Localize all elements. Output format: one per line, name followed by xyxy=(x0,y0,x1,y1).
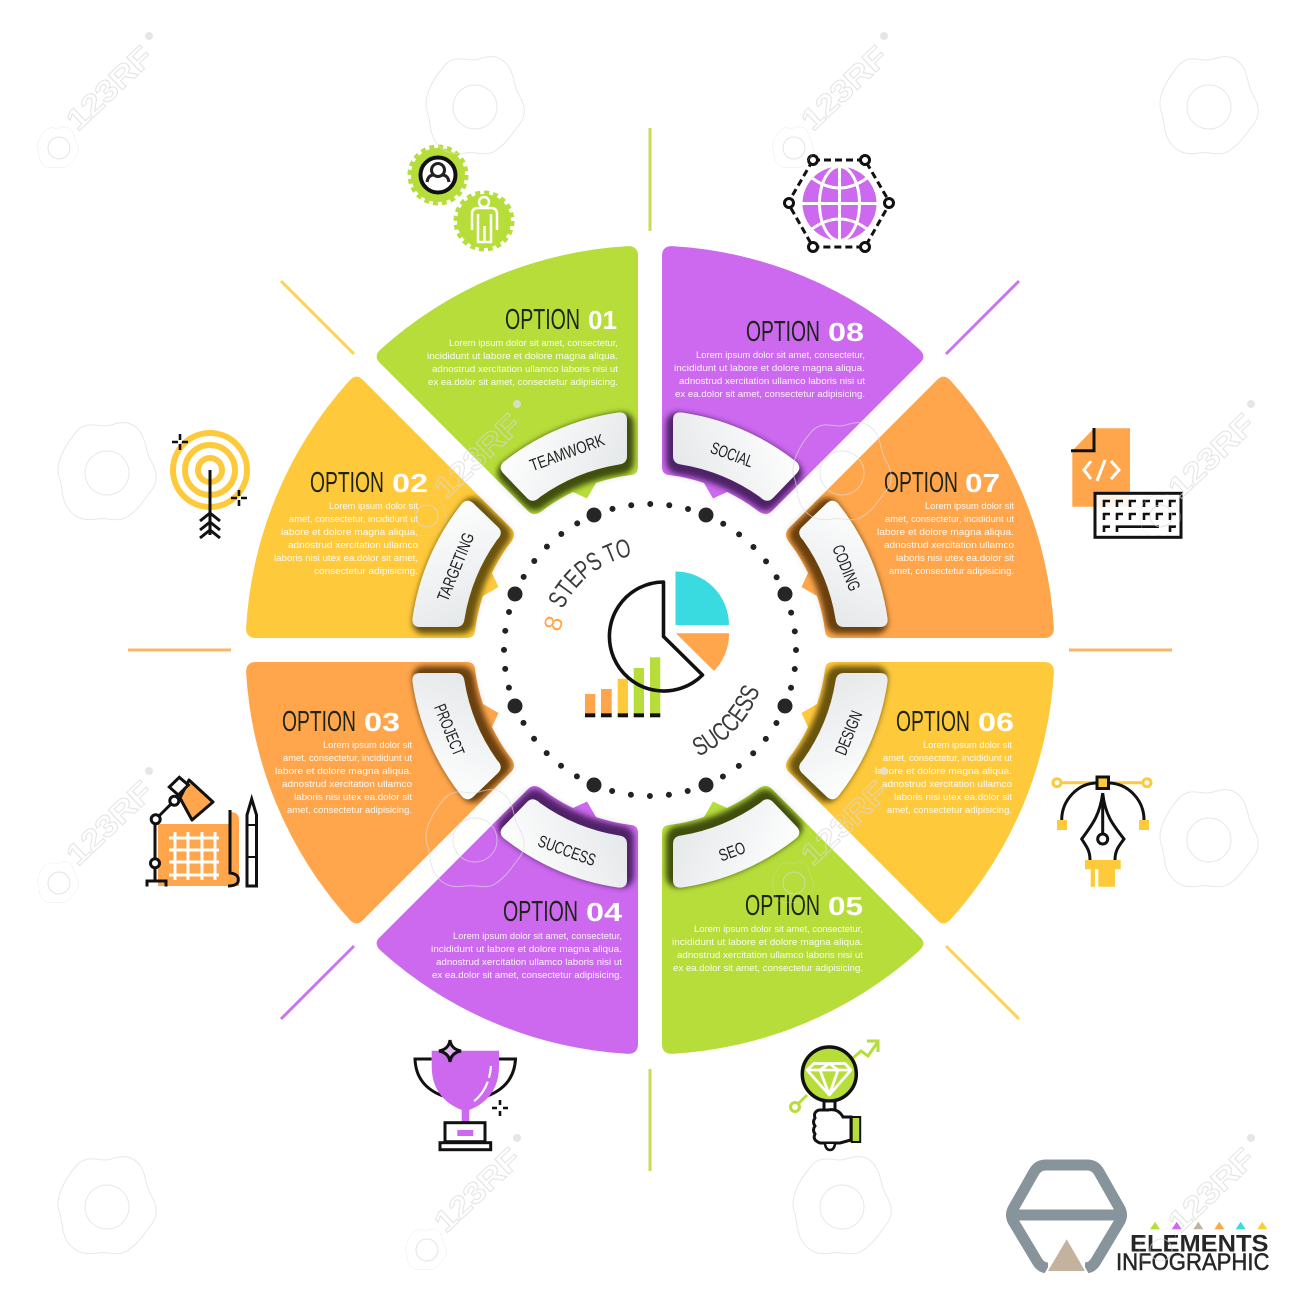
body text: amet, consectetur, incididunt ut xyxy=(885,514,1015,524)
chart: pie xyxy=(676,572,729,671)
body text: adnostrud xercitation ullamco laboris nisi ut xyxy=(677,950,864,960)
segment shape and tab xyxy=(662,246,923,514)
icon: network globe xyxy=(784,156,894,252)
watermarks: 123RF: 123RF xyxy=(428,1142,528,1239)
body text: incididunt ut labore et dolore magna aliqua. xyxy=(674,363,865,373)
body text: labore et dolore magna aliqua. xyxy=(877,527,1014,537)
body text: incididunt ut labore et dolore magna aliqua. xyxy=(431,944,622,954)
panel: option 06 xyxy=(786,662,1054,923)
watermarks: 123RF: 123RF xyxy=(60,775,160,872)
heading: 07 xyxy=(965,468,1000,498)
body text: labore et dolore magna aliqua. xyxy=(281,527,418,537)
heading: 05 xyxy=(828,891,863,921)
heading: 04 xyxy=(586,897,623,927)
body text xyxy=(275,740,413,815)
body text: incididunt ut labore et dolore magna aliqua. xyxy=(427,351,618,361)
heading: OPTION xyxy=(282,706,356,738)
body text: amet, consectetur, incididunt ut xyxy=(883,753,1013,763)
center title: success: SUCCESS xyxy=(692,686,758,755)
icon: target and arrow xyxy=(172,433,247,538)
line: bottom ray xyxy=(648,1069,652,1171)
chart: bars xyxy=(585,657,660,717)
tab label: SOCIAL xyxy=(708,438,756,471)
logo: wordmark xyxy=(1116,1231,1270,1276)
body text: laboris nisi utex ea.dolor sit xyxy=(894,792,1013,802)
body text: adnostrud xercitation ullamco xyxy=(884,540,1014,550)
icon: code file and keyboard xyxy=(1071,428,1181,537)
heading: 08 xyxy=(828,317,864,347)
body text: incididunt ut labore et dolore magna aliqua. xyxy=(672,937,863,947)
body text: ex ea.dolor sit amet, consectetur adipisicing. xyxy=(675,389,865,399)
body text xyxy=(427,338,619,387)
segment shape and tab xyxy=(377,786,638,1054)
tab label: SUCCESS xyxy=(535,832,598,870)
heading: 06 xyxy=(978,707,1014,737)
heading: 03 xyxy=(364,707,400,737)
heading: 02 xyxy=(392,468,428,498)
panel: option 01 xyxy=(377,246,638,514)
segment shape and tab xyxy=(377,246,638,514)
tab label: PROJECT xyxy=(430,701,468,759)
chart: pie outline xyxy=(609,582,702,691)
panel: option 08 xyxy=(662,246,923,514)
panel: option 05 xyxy=(662,786,923,1054)
body text: Lorem ipsum dolor sit amet, consectetur, xyxy=(453,931,622,941)
body text: amet, consectetur adipisicing. xyxy=(287,805,412,815)
body text: adnostrud xercitation ullamco laboris nisi ut xyxy=(432,364,619,374)
line: top ray xyxy=(648,128,652,231)
heading: OPTION xyxy=(505,304,580,336)
watermarks: 123RF: 123RF xyxy=(795,40,895,137)
body text: labore et dolore magna aliqua. xyxy=(275,766,412,776)
segment shape and tab xyxy=(662,786,923,1054)
watermarks: 123RF: 123RF xyxy=(60,40,160,137)
tab label: TARGETING xyxy=(434,530,478,604)
icon: pen tool xyxy=(1053,777,1151,887)
dotted ring xyxy=(504,504,796,796)
heading: OPTION xyxy=(896,706,970,738)
line: lower-right ray xyxy=(946,946,1019,1019)
logo: wordmark: ELEMENTS xyxy=(1130,1231,1268,1258)
body text: amet, consectetur, incididunt ut xyxy=(283,753,413,763)
logo: wordmark: INFOGRAPHIC xyxy=(1116,1249,1270,1276)
tab label: SEO xyxy=(716,838,748,865)
body text: Lorem ipsum dolor sit amet, consectetur, xyxy=(694,924,863,934)
body text: adnostrud xercitation ullamco xyxy=(288,540,418,550)
body text: ex ea.dolor sit amet, consectetur adipisicing. xyxy=(432,970,622,980)
icon: gem under magnifier xyxy=(790,1041,878,1150)
icon: blueprint and lamp xyxy=(147,777,256,886)
body text xyxy=(672,924,864,973)
body text: amet, consectetur adipisicing. xyxy=(889,566,1014,576)
icon: teamwork gears xyxy=(410,146,512,250)
body text: ex ea.dolor sit amet, consectetur adipisicing. xyxy=(673,963,863,973)
line: upper-right ray xyxy=(946,281,1019,354)
segment shape and tab xyxy=(246,662,514,923)
body text: adnostrud xercitation ullamco laboris nisi ut xyxy=(436,957,623,967)
body text: Lorem ipsum dolor sit xyxy=(925,501,1015,511)
logo: hexagon mark xyxy=(1010,1165,1123,1276)
body text xyxy=(877,501,1015,576)
heading: OPTION xyxy=(884,467,958,499)
heading: 01 xyxy=(588,305,617,335)
line: left ray xyxy=(128,648,231,652)
heading: OPTION xyxy=(746,316,820,348)
body text: laboris nisi utex ea.dolor sit amet, xyxy=(274,553,418,563)
body text: Lorem ipsum dolor sit xyxy=(923,740,1013,750)
panel: option 07 xyxy=(786,377,1054,638)
body text: Lorem ipsum dolor sit amet, consectetur, xyxy=(449,338,618,348)
tab label: TEAMWORK xyxy=(527,430,607,475)
center title: 8 steps to xyxy=(538,540,630,634)
center title: 8 steps to: STEPS TO xyxy=(549,540,630,607)
logo: colored triangles xyxy=(1150,1222,1267,1229)
body text xyxy=(875,740,1013,815)
body text: labore et dolore magna aliqua. xyxy=(875,766,1012,776)
tab label: DESIGN xyxy=(831,708,866,758)
body text: ex ea.dolor sit amet, consectetur adipisicing. xyxy=(428,377,618,387)
body text: Lorem ipsum dolor sit xyxy=(323,740,413,750)
body text xyxy=(431,931,623,980)
body text: adnostrud xercitation ullamco xyxy=(882,779,1012,789)
icon: trophy xyxy=(415,1040,516,1150)
watermarks: 123RF: 123RF xyxy=(795,775,895,872)
body text: laboris nisi utex ea.dolor sit xyxy=(294,792,413,802)
body text: adnostrud xercitation ullamco laboris nisi ut xyxy=(679,376,866,386)
segment shape and tab xyxy=(246,377,514,638)
line: lower-left ray xyxy=(281,946,354,1019)
body text: amet, consectetur adipisicing. xyxy=(887,805,1012,815)
panel: option 02 xyxy=(246,377,514,638)
heading: OPTION xyxy=(310,467,384,499)
line: right ray xyxy=(1069,648,1172,652)
panel: option 04 xyxy=(377,786,638,1054)
body text: Lorem ipsum dolor sit xyxy=(329,501,419,511)
body text: adnostrud xercitation ullamco xyxy=(282,779,412,789)
heading: OPTION xyxy=(745,890,820,922)
tab label: CODING xyxy=(828,542,864,594)
body text: Lorem ipsum dolor sit amet, consectetur, xyxy=(696,350,865,360)
panel: option 03 xyxy=(246,662,514,923)
body text xyxy=(274,501,419,576)
center title: 8 steps to: 8 xyxy=(538,613,569,634)
heading: OPTION xyxy=(503,896,578,928)
body text: laboris nisi utex ea.dolor sit xyxy=(896,553,1015,563)
body text: amet, consectetur, incididunt ut xyxy=(289,514,419,524)
watermarks: 123RF: 123RF xyxy=(1162,1142,1262,1239)
segment shape and tab xyxy=(786,662,1054,923)
body text: consectetur adipisicing. xyxy=(314,566,418,576)
line: upper-left ray xyxy=(281,281,354,354)
body text xyxy=(674,350,866,399)
watermarks: 123RF: 123RF xyxy=(1162,408,1262,505)
segment shape and tab xyxy=(786,377,1054,638)
watermarks: 123RF: 123RF xyxy=(428,408,528,505)
